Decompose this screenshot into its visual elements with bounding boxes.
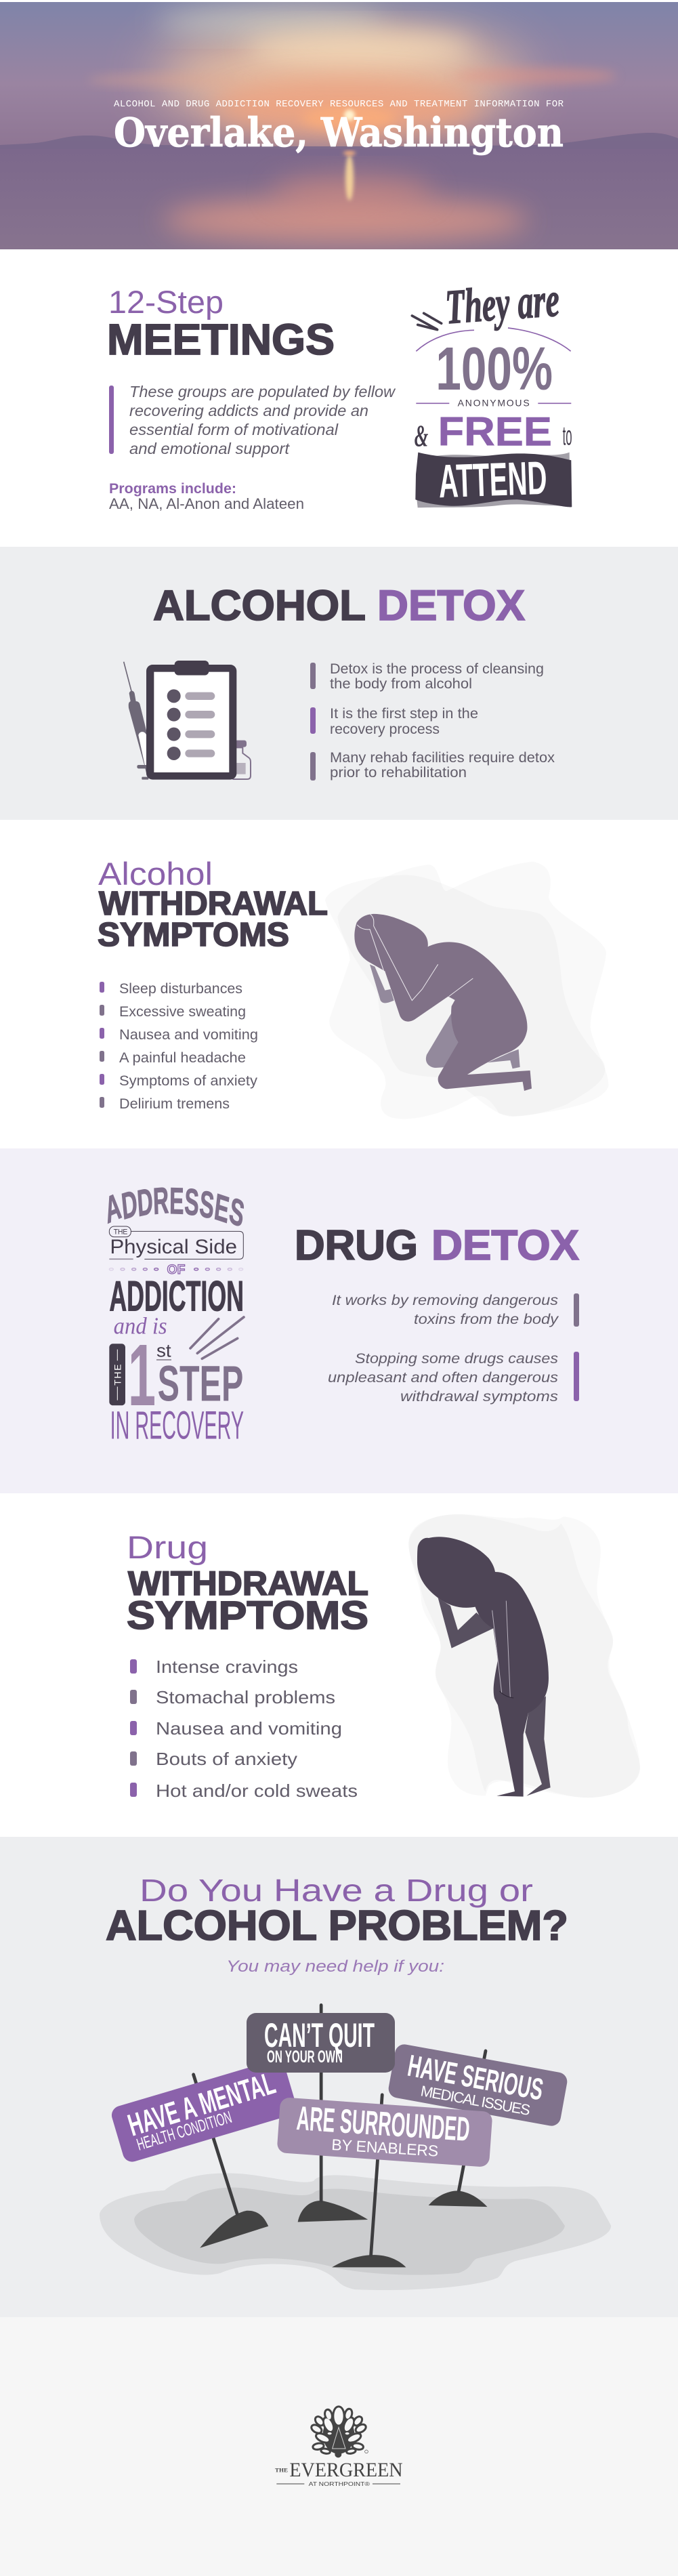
sign: are surrounded by enablers — [277, 2097, 492, 2167]
sign: have a mental health condition: HEALTH CONDITION — [135, 2108, 234, 2155]
heading line 1: Do You Have a Drug or — [140, 1873, 533, 1908]
programs include: AA, NA, Al-Anon and Alateen — [109, 495, 304, 512]
burst lines — [190, 1317, 244, 1358]
sign: have serious medical issues: MEDICAL ISSUES — [419, 2082, 532, 2119]
paragraph: and emotional support — [129, 440, 291, 457]
point 2: unpleasant and often dangerous — [328, 1370, 559, 1386]
logo: the evergreen at northpoint — [275, 2407, 403, 2487]
programs include — [109, 481, 304, 512]
100 percent: 100% — [436, 335, 553, 403]
panel: do you have a problem — [0, 1837, 678, 2317]
point 2: withdrawal symptoms — [400, 1389, 559, 1405]
heading: meetings: MEETINGS — [107, 315, 335, 364]
symptom list: Nausea and vomiting — [119, 1027, 258, 1043]
point 1: It works by removing dangerous — [332, 1293, 559, 1308]
symptom list: Bouts of anxiety — [156, 1749, 297, 1769]
sunset lake photo background — [0, 0, 678, 249]
sign: have serious medical issues: HAVE SERIOUS — [405, 2048, 546, 2107]
lettering: addresses the physical side of addiction: THE — [114, 1228, 127, 1237]
lettering: addresses the physical side of addiction: OF — [167, 1263, 186, 1277]
paragraph: recovering addicts and provide an — [129, 402, 368, 419]
arc — [416, 328, 571, 351]
step: STEP — [158, 1355, 243, 1411]
panel: alcohol withdrawal symptoms — [0, 820, 678, 1148]
sign: can't quit on your own — [247, 2013, 395, 2073]
subheading: You may need help if you: — [226, 1957, 444, 1976]
and is: and is — [114, 1312, 167, 1339]
bullet 2: recovery process — [330, 722, 440, 737]
header subtitle: ALCOHOL AND DRUG ADDICTION RECOVERY RESOURCES AND TREATMENT INFORMATION FOR — [114, 99, 564, 110]
sign: have a mental health condition — [110, 2058, 299, 2164]
bullet 3 — [310, 750, 555, 781]
paragraph — [129, 383, 396, 457]
symptom list: Symptoms of anxiety — [119, 1073, 258, 1089]
sign: have serious medical issues — [387, 2043, 569, 2127]
bullet 2 — [310, 706, 478, 737]
addiction: ADDICTION — [109, 1272, 244, 1320]
illustration: kneeling figure — [325, 862, 608, 1119]
symptom list: Sleep disturbances — [119, 981, 242, 997]
banner — [415, 453, 572, 507]
bullet 3: Many rehab facilities require detox — [330, 750, 555, 766]
illustration: standing figure — [408, 1514, 640, 1798]
lettering: addresses the physical side of addiction: IN RECOVERY — [110, 1403, 244, 1447]
heading: symptoms: SYMPTOMS — [127, 1594, 368, 1638]
attend: ATTEND — [438, 451, 548, 507]
evergreen: EVERGREEN — [289, 2459, 403, 2481]
symptom list — [130, 1657, 358, 1801]
addresses arc text: ADDRESSES — [102, 1179, 247, 1236]
physical side box — [131, 1231, 243, 1259]
of with dots — [109, 1268, 243, 1270]
point 1 — [332, 1293, 579, 1327]
the: THE — [275, 2466, 288, 2473]
symptom list: Nausea and vomiting — [156, 1718, 342, 1739]
heading: 12-Step: 12-Step — [108, 284, 224, 320]
point 1: toxins from the body — [414, 1312, 559, 1327]
big 1: 1 — [128, 1327, 156, 1424]
heading: alcohol detox: DETOX — [377, 582, 525, 629]
bullet 1 — [310, 661, 544, 692]
the vertical pill — [109, 1344, 125, 1405]
panel: drug withdrawal symptoms — [0, 1493, 678, 1837]
heading: alcohol detox: ALCOHOL — [153, 582, 366, 629]
point 2 — [328, 1351, 579, 1405]
lettering: addresses the physical side of addiction — [102, 1179, 247, 1447]
heading: alcohol detox — [153, 582, 525, 629]
panel: 12-step meetings: to — [563, 421, 572, 451]
panel: alcohol detox — [0, 547, 678, 820]
heading line 2: ALCOHOL PROBLEM? — [106, 1903, 568, 1949]
heading: withdrawal: WITHDRAWAL — [128, 1564, 368, 1602]
sign: have a mental health condition: HAVE A MENTAL — [124, 2065, 279, 2143]
symptom list — [100, 981, 258, 1112]
accent bar — [109, 386, 114, 454]
lettering: addresses the physical side of addiction: THE — [112, 1363, 123, 1386]
lettering: addresses the physical side of addiction: Physical Side — [110, 1236, 237, 1258]
point 2: Stopping some drugs causes — [355, 1351, 559, 1367]
logo emblem — [312, 2407, 368, 2457]
symptom list: Stomachal problems — [156, 1687, 335, 1707]
paragraph: essential form of motivational — [129, 421, 339, 438]
panel: sunset header — [0, 0, 678, 249]
heading: drug detox: DETOX — [431, 1222, 579, 1269]
burst lines — [412, 313, 442, 330]
illustration: ground shadows and sign stands — [100, 2006, 611, 2290]
symptom list: A painful headache — [119, 1050, 246, 1066]
stand for front sign — [332, 2095, 406, 2267]
they are script: They are — [444, 273, 561, 334]
header title: Overlake, Washington — [114, 109, 564, 156]
symptom list: Excessive sweating — [119, 1004, 246, 1020]
heading: drug: Drug — [127, 1529, 208, 1565]
icon: clipboard with syringe and vial — [124, 661, 251, 780]
heading: symptoms: SYMPTOMS — [98, 917, 289, 953]
lettering: they are 100% anonymous and free to attend — [412, 273, 572, 507]
symptom list: Hot and/or cold sweats — [156, 1781, 358, 1801]
the pill — [109, 1226, 131, 1237]
programs include: Programs include: — [109, 481, 236, 497]
panel: footer — [0, 2317, 678, 2576]
bullet 1: the body from alcohol — [330, 676, 472, 692]
panel: 12-step meetings — [0, 249, 678, 547]
free: FREE — [438, 409, 552, 454]
sign: are surrounded by enablers: ARE SURROUNDED — [295, 2099, 471, 2148]
anonymous: ANONYMOUS — [458, 397, 530, 408]
panel: drug detox — [0, 1148, 678, 1493]
sign: can't quit on your own: CAN’T QUIT — [264, 2016, 375, 2054]
bullet 3: prior to rehabilitation — [330, 765, 467, 781]
bullet 1: Detox is the process of cleansing — [330, 661, 544, 677]
st: st — [156, 1341, 171, 1361]
banner back — [417, 453, 570, 507]
symptom list: Intense cravings — [156, 1657, 298, 1677]
heading: drug detox — [295, 1222, 579, 1269]
at northpoint: AT NORTHPOINT® — [309, 2480, 370, 2487]
heading: withdrawal: WITHDRAWAL — [99, 886, 328, 922]
bullet 2: It is the first step in the — [330, 706, 478, 722]
heading: drug detox: DRUG — [295, 1222, 418, 1269]
symptom list: Delirium tremens — [119, 1096, 230, 1112]
sign: are surrounded by enablers: BY ENABLERS — [331, 2136, 439, 2160]
heading: alcohol: Alcohol — [98, 856, 213, 892]
paragraph: These groups are populated by fellow — [129, 383, 396, 400]
sign: can't quit on your own: ON YOUR OWN — [267, 2048, 343, 2066]
ampersand: & — [415, 419, 428, 453]
